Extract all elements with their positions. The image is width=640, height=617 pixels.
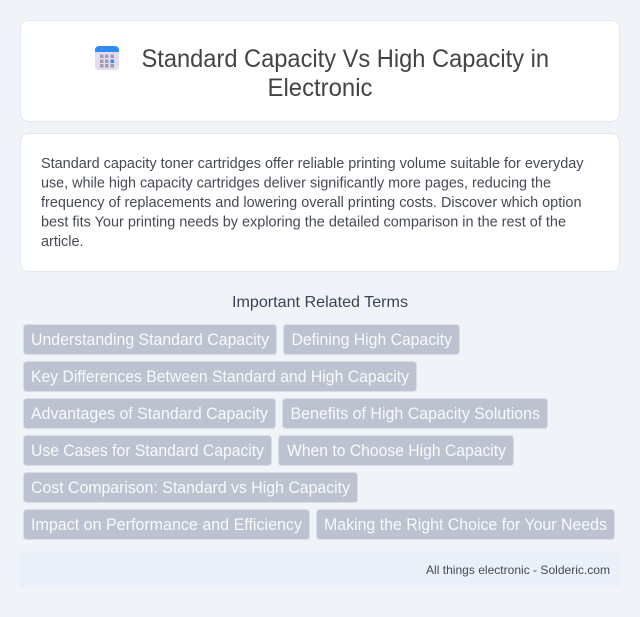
text block: description	[41, 156, 584, 250]
tag: Use Cases for Standard Capacity	[31, 442, 265, 460]
title: Standard Capacity Vs High Capacity in	[142, 45, 549, 73]
footer	[20, 553, 620, 587]
text block: description: use, while high capacity cartridges deliver significantly more pages, reducing the	[41, 176, 551, 192]
title	[142, 45, 549, 102]
tag	[282, 398, 548, 428]
footer: All things electronic - Solderic.com	[426, 563, 610, 577]
tag	[278, 436, 514, 466]
tag	[24, 510, 310, 540]
tag: Understanding Standard Capacity	[31, 331, 270, 349]
tag	[316, 510, 614, 540]
tag	[24, 362, 416, 392]
tag: Making the Right Choice for Your Needs	[324, 516, 607, 534]
text block: description: frequency of replacements and lowering overall printing costs. Discover which option	[41, 195, 582, 211]
icon: calendar	[95, 46, 119, 70]
text block: description: article.	[41, 234, 84, 250]
tag	[24, 436, 272, 466]
tag	[24, 398, 276, 428]
panel: title card	[20, 20, 620, 122]
tag: Advantages of Standard Capacity	[31, 405, 269, 423]
tag: Benefits of High Capacity Solutions	[290, 405, 540, 423]
tag: Defining High Capacity	[292, 331, 453, 349]
tag: Key Differences Between Standard and High Capacity	[31, 368, 410, 386]
tag	[24, 472, 358, 502]
tag: Impact on Performance and Efficiency	[31, 516, 303, 534]
tag: When to Choose High Capacity	[287, 442, 507, 460]
tag: Cost Comparison: Standard vs High Capacity	[31, 479, 351, 497]
text block: description: Standard capacity toner cartridges offer reliable printing volume suitable for everyday	[41, 156, 584, 172]
title: Electronic	[268, 74, 372, 102]
text block: description: best fits Your printing needs by exploring the detailed comparison in the rest of the	[41, 214, 566, 230]
heading: important related terms: Important Related Terms	[232, 294, 408, 311]
tag	[284, 324, 460, 354]
panel: description card	[20, 134, 620, 272]
tag	[24, 324, 276, 354]
tag list: related terms	[24, 324, 614, 540]
